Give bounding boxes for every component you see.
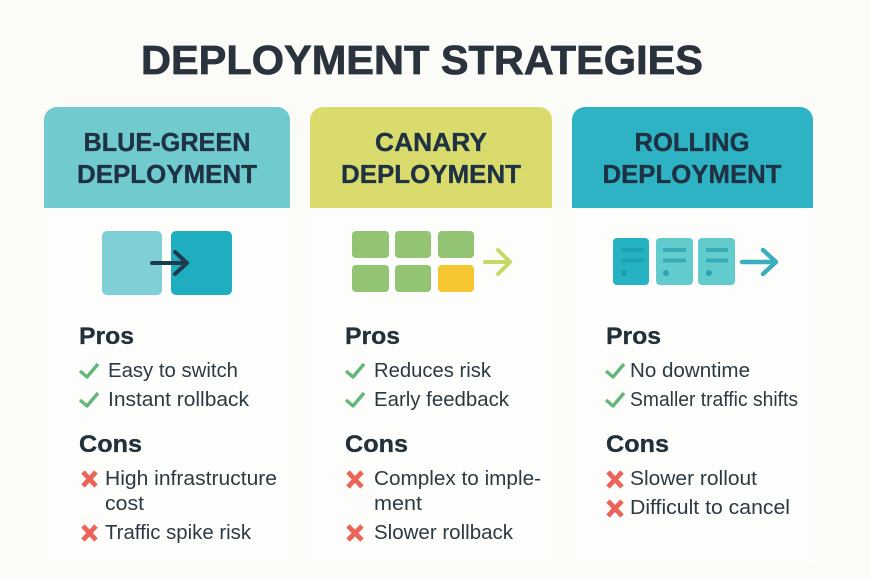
cons list: Difficult to cancel	[630, 497, 790, 519]
pros heading: Pros	[345, 323, 400, 350]
rolling header: ROLLING	[634, 127, 750, 157]
canary header: CANARY	[375, 127, 487, 157]
rolling header	[572, 107, 813, 208]
panel: canary deployment	[310, 107, 552, 566]
cons list	[348, 468, 541, 544]
icon: canary grid	[352, 231, 510, 292]
pros heading: Pros	[79, 323, 134, 350]
icon: rolling servers	[613, 238, 776, 285]
canary header: DEPLOYMENT	[341, 159, 521, 189]
panel: rolling deployment	[572, 107, 813, 566]
panel: blue-green deployment	[44, 107, 290, 566]
cons list: Slower rollout	[630, 468, 757, 490]
cons list: Complex to imple-	[374, 468, 541, 490]
icon: blue-green switch	[102, 231, 232, 295]
cons list	[83, 468, 277, 544]
cons heading: Cons	[79, 431, 142, 458]
blue-green header: BLUE-GREEN	[84, 127, 250, 157]
title: DEPLOYMENT STRATEGIES	[141, 37, 703, 83]
canary header	[310, 107, 552, 208]
cons list: Traffic spike risk	[105, 522, 252, 544]
cons list: cost	[105, 493, 144, 515]
rolling header: DEPLOYMENT	[602, 159, 782, 189]
cons list: High infrastructure	[105, 468, 277, 490]
pros list: Smaller traffic shifts	[630, 389, 798, 411]
blue-green header: DEPLOYMENT	[77, 159, 257, 189]
pros list: No downtime	[630, 360, 750, 382]
pros list: Instant rollback	[108, 389, 250, 411]
pros list	[606, 360, 798, 411]
blue-green header	[44, 107, 290, 208]
pros list: Early feedback	[374, 389, 510, 411]
cons list: Slower rollback	[374, 522, 514, 544]
cons list	[608, 468, 790, 519]
cons heading: Cons	[606, 431, 669, 458]
pros list: Reduces risk	[374, 360, 492, 382]
pros list	[80, 360, 250, 411]
cons list: ment	[374, 493, 422, 515]
pros list: Easy to switch	[108, 360, 238, 382]
cons heading: Cons	[345, 431, 408, 458]
pros heading: Pros	[606, 323, 661, 350]
pros list	[346, 360, 510, 411]
